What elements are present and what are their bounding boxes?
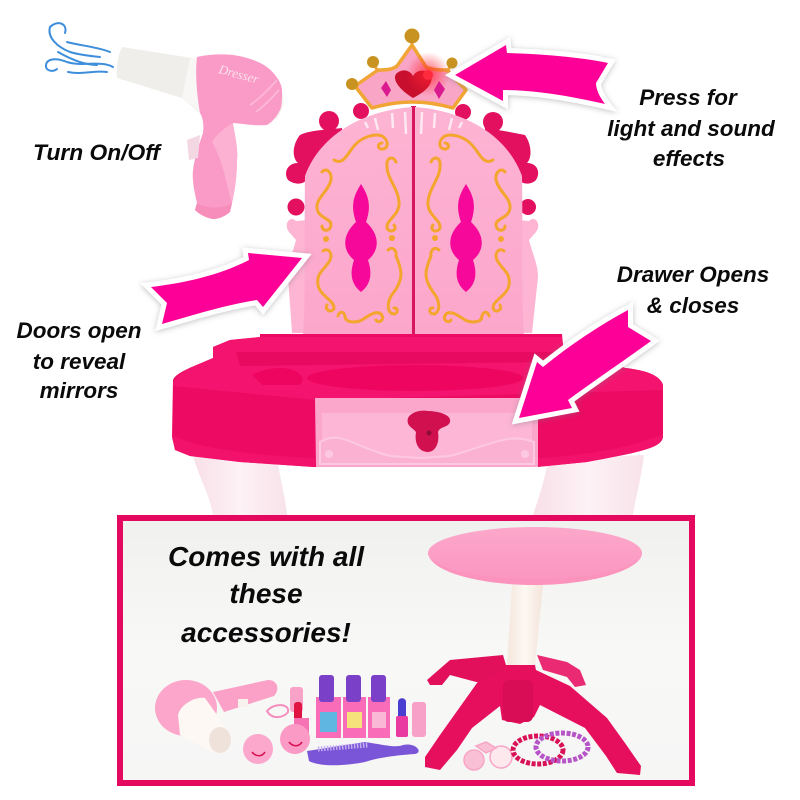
arrow: drawer: [519, 310, 651, 418]
stool: [425, 527, 642, 775]
label: press for light and sound effects: effects: [653, 146, 725, 171]
stool seat: [428, 553, 642, 585]
scroll ornaments: [286, 103, 538, 216]
left door: [303, 107, 412, 336]
icon: hair dryer: [117, 47, 284, 219]
label: doors open: [16, 318, 142, 403]
flower hair clips: [243, 705, 310, 764]
stool pole: [507, 585, 543, 665]
comb: [307, 742, 419, 765]
tabletop: [172, 334, 663, 467]
drawer: [315, 398, 538, 467]
right door: [415, 107, 524, 336]
bead bracelets: [513, 733, 588, 764]
legs: [193, 456, 287, 515]
label: doors open: to reveal: [33, 349, 126, 374]
lipstick: [290, 687, 309, 736]
label: drawer opens: [617, 262, 769, 318]
label: drawer opens: & closes: [647, 293, 739, 318]
dryer brand text: Dresser: [216, 61, 261, 87]
stool base: [425, 665, 641, 775]
side hearts and pillars: [287, 219, 308, 333]
icon: wind lines: [46, 23, 113, 73]
label: press for light and sound effects: Press for: [639, 85, 738, 110]
arrow: doors: [151, 253, 302, 324]
small lipstick and clear cap: [396, 698, 426, 737]
heading: comes with all these accessories: accessories!: [181, 617, 351, 648]
panel: accessories: [120, 518, 692, 783]
label: press for light and sound effects: light and sound: [607, 116, 776, 141]
heading: comes with all these accessories: [168, 541, 365, 648]
nail polish bottles: [316, 675, 390, 738]
stool hub shade: [503, 680, 533, 722]
vanity table: [172, 334, 663, 515]
label: doors open: mirrors: [40, 378, 118, 403]
label: doors open: Doors open: [16, 318, 142, 343]
heading: comes with all these accessories: these: [229, 578, 303, 609]
vanity mirror unit: [286, 28, 538, 336]
heading: comes with all these accessories: Comes with all: [168, 541, 365, 572]
arrow: press for light: [455, 45, 608, 104]
label: turn on/off: Turn On/Off: [33, 140, 163, 165]
crown: [346, 28, 466, 108]
rings: [464, 742, 512, 770]
small dryer: [155, 680, 277, 753]
label: press for light and sound effects: [607, 85, 776, 171]
stool back legs: [427, 655, 508, 685]
label: drawer opens: Drawer Opens: [617, 262, 769, 287]
drawer handle: [408, 411, 450, 452]
